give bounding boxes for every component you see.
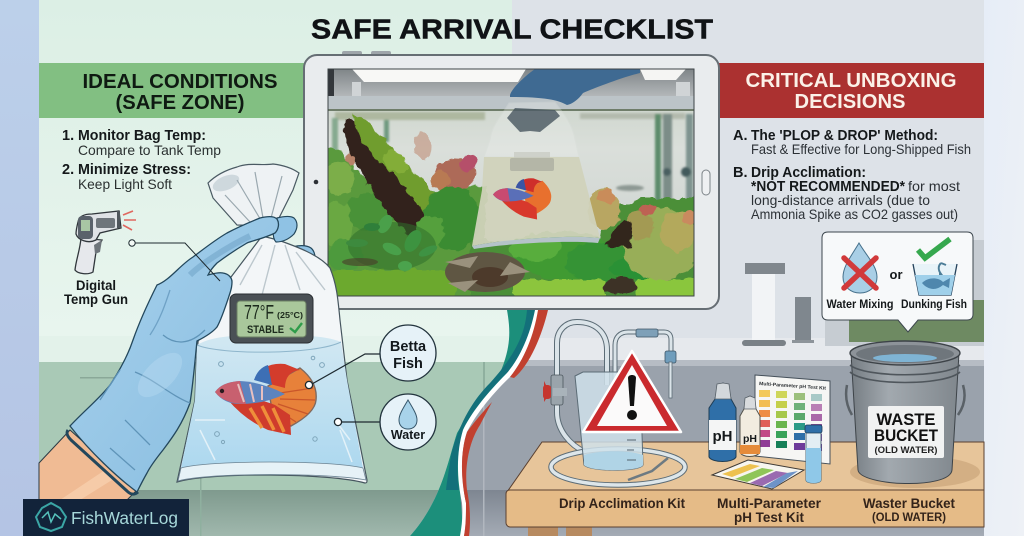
label: ph test kit: Multi-Parameter: [717, 495, 822, 511]
thermometer display: (25°C): [277, 310, 303, 320]
label: digital temp gun: Temp Gun: [64, 291, 128, 307]
panel: decisions list: The 'PLOP & DROP' Method:: [751, 128, 938, 144]
panel: safe zone list: [62, 128, 221, 192]
plants layer: [320, 114, 700, 300]
waste bucket: BUCKET: [874, 427, 938, 445]
icon: temp gun: [75, 211, 136, 274]
fish bag: [177, 164, 367, 483]
waste bucket: (OLD WATER): [874, 445, 938, 456]
thermometer display: STABLE: [247, 324, 284, 336]
logo: [23, 499, 189, 536]
panel: ideal conditions heading: (SAFE ZONE): [116, 92, 244, 114]
tablet with aquarium photo: [304, 51, 719, 309]
panel: safe zone list: Keep Light Soft: [78, 176, 172, 192]
arm skin: [39, 430, 137, 500]
label: digital temp gun: [64, 277, 128, 307]
s-curve divider: [410, 310, 548, 536]
panel: decisions list: long-distance arrivals (due to: [751, 192, 930, 208]
panel: critical decisions heading: DECISIONS: [794, 91, 906, 113]
anubias leaves and rosette: [342, 212, 530, 292]
panel: decisions list: [733, 128, 971, 222]
panel: decisions list: *NOT RECOMMENDED*: [751, 179, 905, 195]
waste bucket: WASTE: [876, 411, 936, 429]
icon: dunking fish cup: [913, 239, 957, 295]
glove back finger: [285, 246, 315, 268]
callout: water mixing or dunking fish: Water Mixing: [826, 299, 894, 311]
panel: decisions list: B.: [733, 165, 748, 181]
label: drip kit: Drip Acclimation Kit: [559, 495, 685, 511]
tank glove: [510, 69, 640, 105]
panel: decisions list: A.: [733, 128, 748, 144]
panel: critical decisions heading: CRITICAL UNBOXING: [746, 70, 956, 92]
panel: decisions list: for most: [908, 178, 960, 194]
table: [506, 442, 984, 536]
panel: decisions list: Fast & Effective for Long-Shipped Fish: [751, 141, 971, 157]
callout: betta fish: [305, 325, 436, 389]
ph test kit: [709, 375, 830, 489]
panel: ideal conditions heading: [39, 63, 304, 118]
icon: crossed water drop: [843, 243, 877, 293]
leader: temp gun to bag: [129, 240, 220, 281]
glove hand: [67, 216, 297, 494]
aquarium scene: [320, 69, 700, 300]
ph test kit: pH: [743, 433, 757, 445]
logo: FishWaterLog: [71, 508, 178, 528]
callout: water: [334, 394, 436, 450]
callout: water mixing or dunking fish: [822, 232, 973, 332]
label: waster bucket: Waster Bucket: [863, 495, 955, 511]
panel: critical decisions heading: [719, 63, 984, 118]
label: waster bucket: (OLD WATER): [872, 510, 946, 524]
panel: safe zone list: Compare to Tank Temp: [78, 142, 221, 158]
title: SAFE ARRIVAL CHECKLIST: [311, 14, 713, 44]
panel: decisions list: Drip Acclimation:: [751, 165, 866, 181]
tank fish: [493, 178, 551, 220]
label: digital temp gun: Digital: [76, 277, 116, 293]
panel: decisions list: Ammonia Spike as CO2 gasses out): [751, 206, 958, 222]
tank bag: [472, 102, 600, 249]
panel: safe zone list: Monitor Bag Temp:: [78, 128, 206, 144]
betta fish: [215, 364, 316, 435]
icon: warning triangle: [583, 351, 681, 432]
callout: betta fish: Betta: [390, 339, 427, 355]
label: ph test kit: pH Test Kit: [734, 509, 804, 525]
panel: ideal conditions heading: IDEAL CONDITIONS: [82, 71, 278, 93]
label: ph test kit: [717, 495, 822, 525]
thermometer display: [230, 294, 313, 343]
callout: water: Water: [391, 428, 425, 442]
panel: safe zone list: 2.: [62, 162, 74, 178]
waste bucket: [846, 341, 980, 488]
background wall filter and tank, right side: [742, 240, 984, 346]
callout: betta fish: Fish: [393, 356, 423, 372]
ph test kit: pH: [712, 428, 732, 445]
callout: water mixing or dunking fish: Dunking Fish: [901, 299, 967, 311]
thermometer display: 77°F: [244, 302, 274, 324]
label: waster bucket: [863, 495, 955, 524]
panel: safe zone list: Minimize Stress:: [78, 162, 191, 178]
panel: safe zone list: 1.: [62, 128, 74, 144]
drip acclimation kit: [543, 322, 685, 485]
ph test kit: Multi-Parameter pH Test Kit: [759, 381, 827, 392]
callout: water mixing or dunking fish: or: [890, 267, 902, 282]
